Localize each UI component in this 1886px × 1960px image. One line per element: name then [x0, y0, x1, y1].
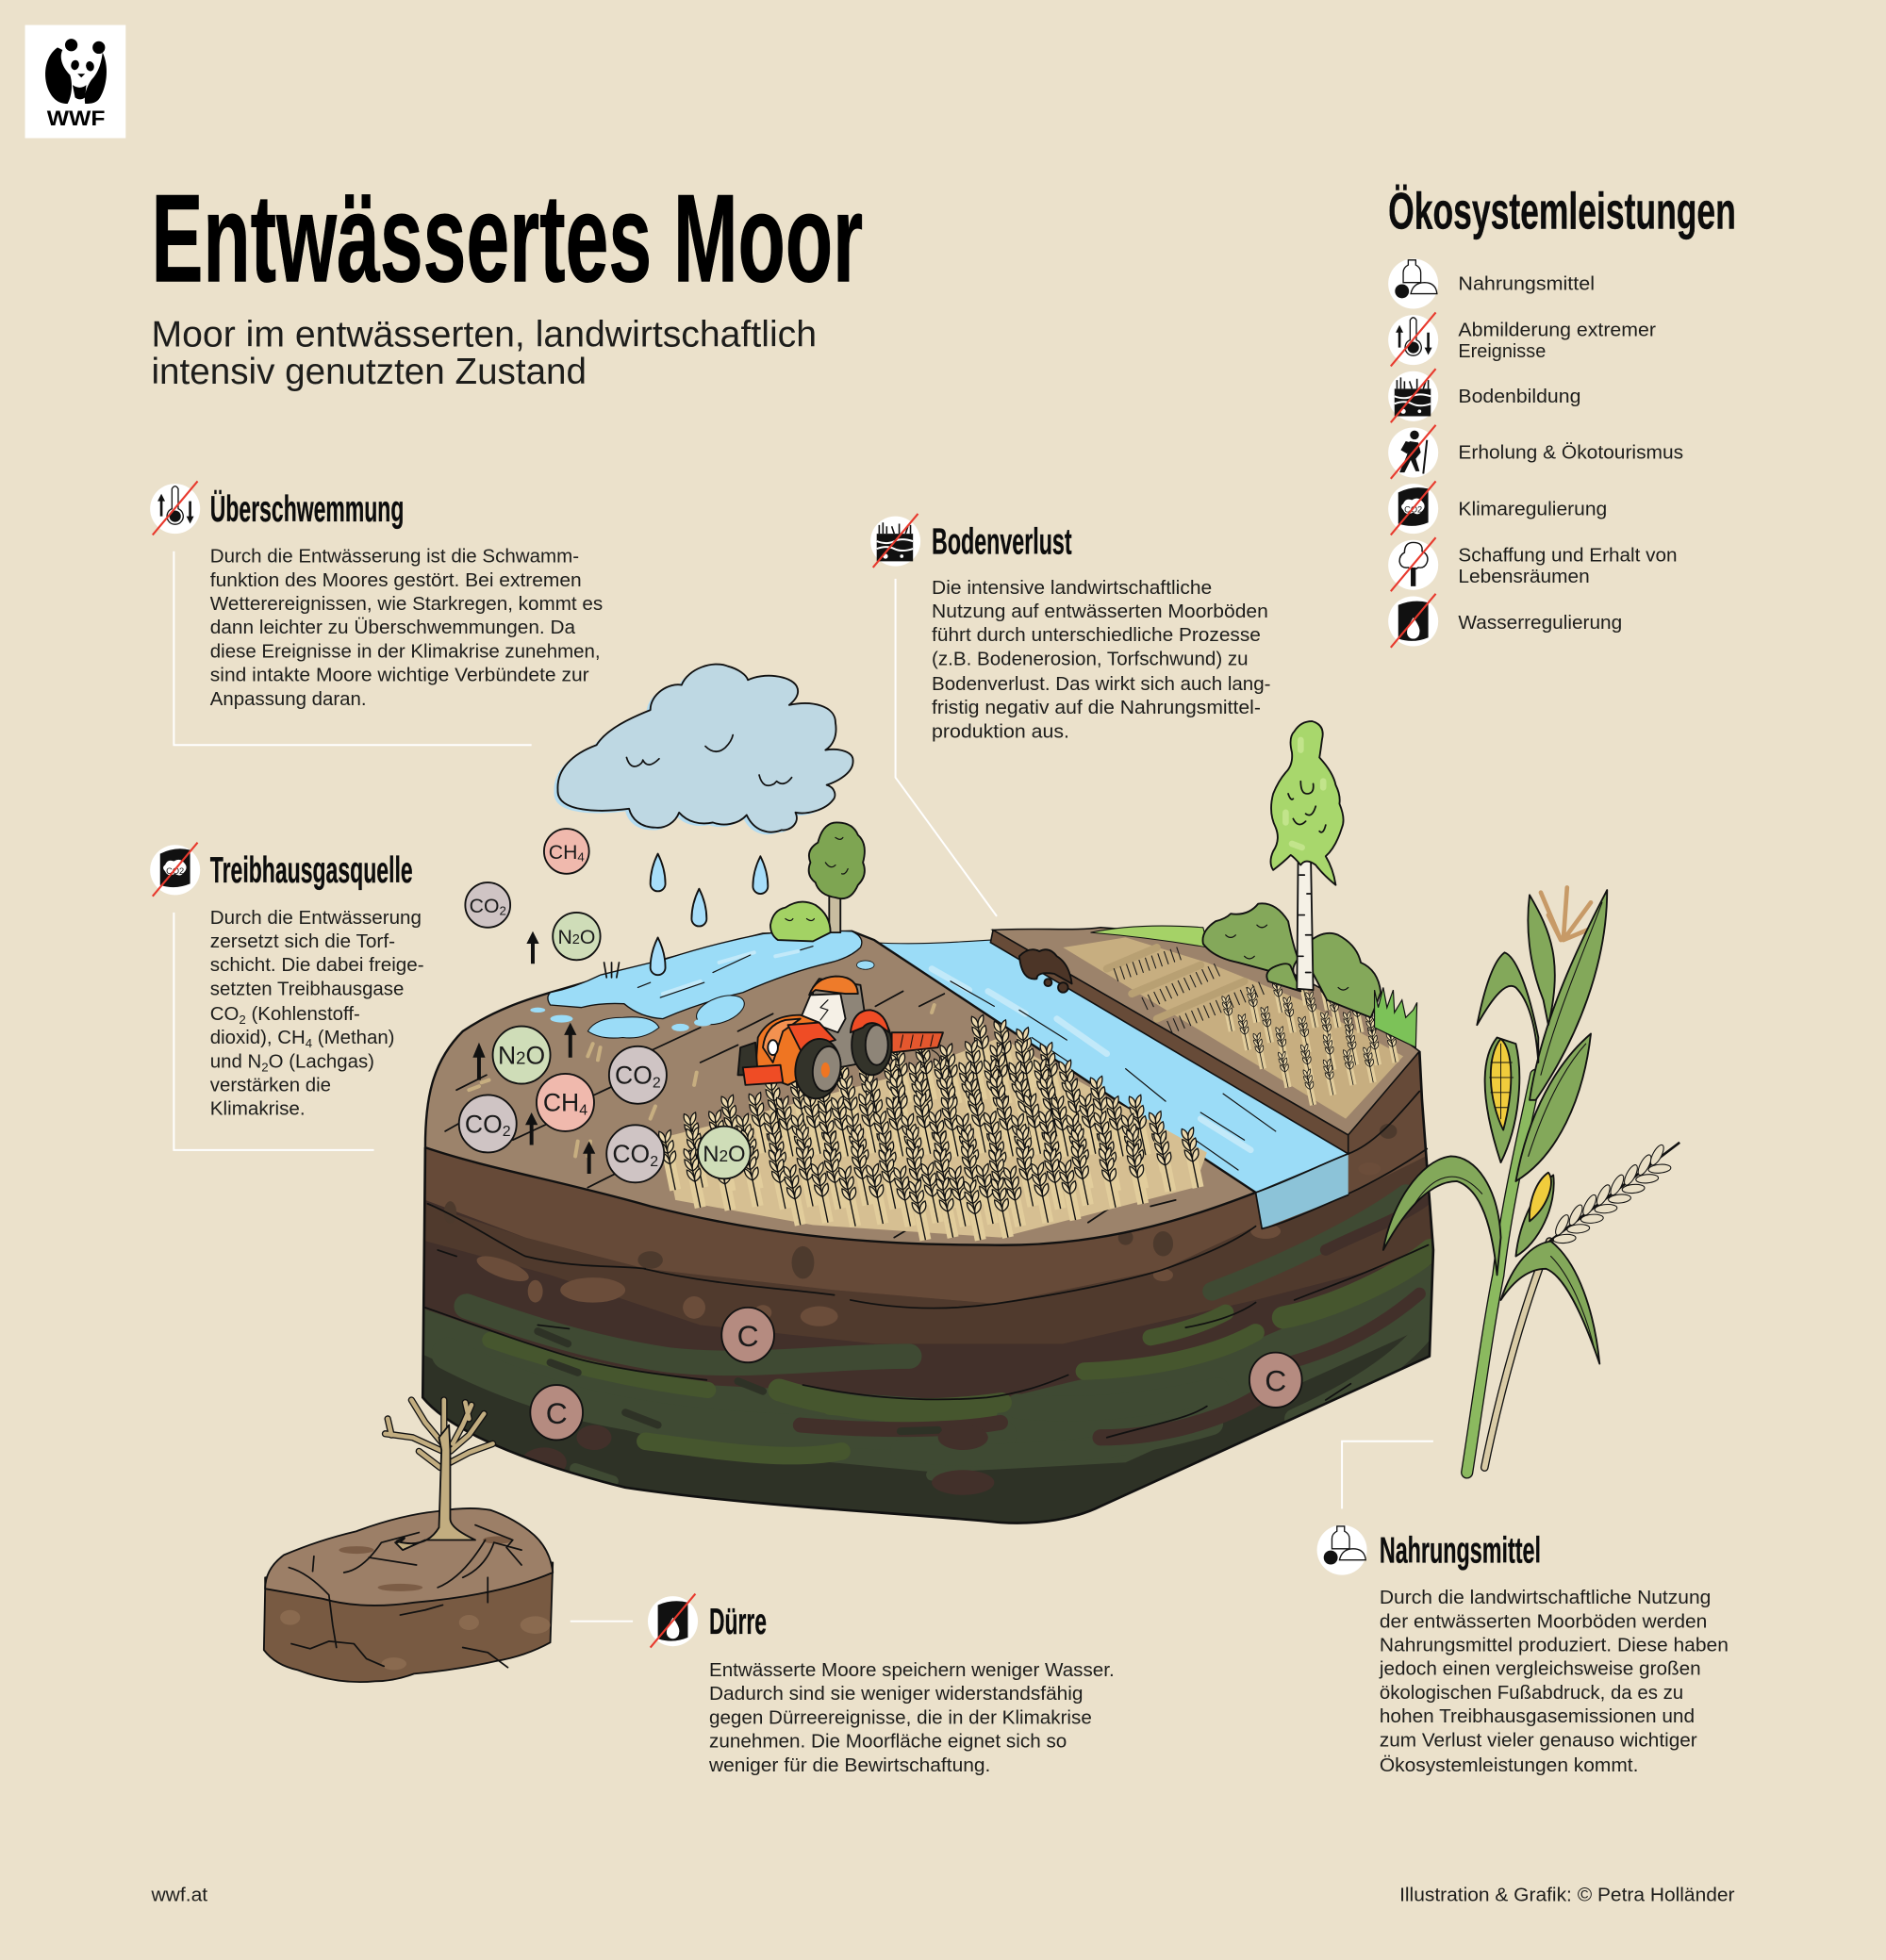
text: Dürre: zunehmen. Die Moorfläche eignet sich so — [709, 1732, 1067, 1753]
corn cobs — [1490, 1039, 1551, 1221]
WWF logo — [25, 25, 125, 139]
tassel — [1541, 887, 1594, 940]
panel: Überschwemmung — [150, 481, 603, 745]
text: Nahrungsmittel: Ökosystemleistungen kommt. — [1380, 1755, 1638, 1776]
illustration: peat clods — [1019, 949, 1072, 993]
tractor cab — [801, 977, 866, 1073]
text: Dürre: gegen Dürreereignisse, die in der Klimakrise — [709, 1707, 1092, 1728]
text: Treibhausgasquelle — [210, 908, 424, 1120]
bubble: CH4 centre: 4 — [579, 1103, 587, 1119]
legend item: Wasserregulierung: Wasserregulierung — [1458, 613, 1622, 634]
bubble: CO2 lower — [606, 1125, 664, 1182]
icon: water barrel crossed out — [648, 1594, 698, 1648]
text: Überschwemmung: Wetterereignissen, wie Starkregen, kommt es — [210, 594, 603, 615]
text: Dürre: weniger für die Bewirtschaftung. — [708, 1755, 990, 1776]
text: Treibhausgasquelle: dioxid), CH — [210, 1028, 306, 1048]
legend item: Bodenbildung — [1388, 369, 1580, 422]
text: Bodenverlust: produktion aus. — [932, 721, 1069, 742]
text: Treibhausgasquelle: CO — [210, 1004, 239, 1025]
bubble: CO2 upper: 2 — [499, 904, 506, 918]
text: Treibhausgasquelle: (Methan) — [312, 1028, 394, 1048]
heading: Nahrungsmittel: Nahrungsmittel — [1380, 1530, 1541, 1571]
bubble: N2O left — [493, 1027, 551, 1084]
icon: rain drops — [651, 854, 768, 975]
text: Treibhausgasquelle: 2 — [239, 1013, 246, 1027]
illustration: tractor — [737, 977, 943, 1101]
heading: Überschwemmung: Überschwemmung — [210, 489, 404, 530]
text: Treibhausgasquelle: 2 — [261, 1060, 269, 1074]
bubble: CH4 upper: 4 — [577, 850, 585, 865]
text: Überschwemmung: diese Ereignisse in der Klimakrise zunehmen, — [210, 641, 601, 662]
illustration: bush and tree behind water — [770, 822, 865, 941]
illustration: carbon markers — [530, 1308, 1302, 1440]
illustration: carbon markers: C — [546, 1396, 568, 1430]
bubble: CO2 lower: CO — [612, 1140, 650, 1168]
tractor front wheel — [791, 1036, 844, 1101]
text: Bodenverlust: führt durch unterschiedliche Prozesse — [932, 625, 1261, 646]
subtitle — [151, 314, 817, 392]
text: Überschwemmung: funktion des Moores gestört. Bei extremen — [210, 570, 582, 591]
legend item: Abmilderung extremer Ereignisse: Ereignisse — [1458, 341, 1546, 362]
icon: rain cloud — [554, 665, 853, 834]
heading: Dürre: Dürre — [709, 1602, 767, 1642]
legend item: Schaffung und Erhalt von Lebensräumen — [1388, 537, 1678, 591]
wheat head — [1549, 1143, 1679, 1244]
footer: credit: Illustration & Grafik: © Petra Holländer — [1399, 1886, 1735, 1906]
bubble: CO2 upper: CO — [470, 896, 499, 917]
bubble: N2O upper: N2O — [557, 927, 595, 948]
illustration: left field surface — [425, 931, 1256, 1245]
legend item: Schaffung und Erhalt von Lebensräumen: Schaffung und Erhalt von — [1458, 545, 1678, 566]
bubble: N2O left: N2O — [498, 1041, 545, 1069]
bubble: N2O lower — [698, 1127, 751, 1178]
text: Nahrungsmittel — [1379, 1588, 1729, 1776]
text: Überschwemmung: dann leichter zu Überschwemmungen. Da — [210, 618, 576, 638]
text: Überschwemmung: Durch die Entwässerung ist die Schwamm- — [210, 547, 579, 568]
heading: Bodenverlust: Bodenverlust — [932, 521, 1072, 562]
illustration: carbon markers: C — [737, 1319, 759, 1353]
panel: Bodenverlust — [870, 514, 1270, 916]
bubble: CO2 left: CO — [465, 1110, 503, 1138]
illustration: right field — [990, 926, 1419, 1154]
legend item: Abmilderung extremer Ereignisse: Abmilderung extremer — [1458, 321, 1656, 341]
bubble: CO2 lower: 2 — [650, 1154, 658, 1170]
legend item: Wasserregulierung — [1388, 594, 1622, 648]
text: Bodenverlust: fristig negativ auf die Nahrungsmittel- — [932, 698, 1261, 718]
text: Nahrungsmittel: jedoch einen vergleichsweise großen — [1379, 1659, 1701, 1680]
illustration: corn and wheat plants — [1383, 887, 1679, 1473]
illustration: carbon markers: C — [1265, 1364, 1286, 1398]
bubble: CO2 left — [459, 1095, 517, 1152]
tractor implement — [892, 1032, 943, 1067]
text: Dürre — [708, 1660, 1115, 1776]
legend item: Klimaregulierung: CO2 — [1404, 505, 1422, 515]
text: Nahrungsmittel: Durch die landwirtschaftliche Nutzung — [1380, 1588, 1711, 1608]
text: Überschwemmung — [210, 547, 603, 710]
legend item: Schaffung und Erhalt von Lebensräumen: Lebensräumen — [1458, 567, 1590, 587]
bubble: CO2 right: 2 — [653, 1076, 661, 1092]
icon: thermometer crossed out — [150, 481, 200, 535]
title: Entwässertes Moor — [151, 169, 863, 308]
text: Treibhausgasquelle: und N — [210, 1051, 261, 1072]
text: Treibhausgasquelle: Klimakrise. — [210, 1099, 306, 1120]
text: Bodenverlust: Nutzung auf entwässerten Moorböden — [932, 601, 1268, 622]
text: Treibhausgasquelle: O (Lachgas) — [269, 1051, 374, 1072]
illustration: peat block soil layers — [413, 1037, 1450, 1538]
text: Bodenverlust — [932, 578, 1270, 742]
illustration: wheat field — [659, 1014, 1207, 1240]
text: Treibhausgasquelle: 4 — [306, 1036, 312, 1050]
bubble: CH4 centre — [537, 1074, 594, 1131]
legend item: Erholung und Ökotourismus: Erholung & Ökotourismus — [1458, 443, 1683, 464]
panel: Dürre — [571, 1594, 1115, 1776]
bubble: CH4 upper — [544, 829, 589, 874]
bubble: CO2 left: 2 — [503, 1124, 511, 1140]
bubble: CO2 right — [609, 1046, 667, 1104]
tractor hood — [737, 1015, 835, 1085]
illustration: birch tree and bushes — [1202, 721, 1417, 1047]
line: Nahrungsmittel connector — [1342, 1441, 1433, 1508]
heading: Treibhausgasquelle: Treibhausgasquelle — [210, 850, 413, 891]
bubble: CO2 upper — [465, 882, 510, 928]
illustration: greenhouse gas bubbles — [459, 829, 751, 1182]
text: Treibhausgasquelle: zersetzt sich die Torf- — [210, 931, 395, 952]
legend item: Bodenbildung: Bodenbildung — [1458, 387, 1580, 407]
text: Nahrungsmittel: zum Verlust vieler genauso wichtiger — [1380, 1730, 1697, 1751]
icon: food — [1317, 1525, 1367, 1575]
arrows: rising gases — [472, 931, 595, 1174]
icon: CO2 bag crossed out — [150, 843, 200, 897]
footer: website: wwf.at — [150, 1886, 207, 1906]
icon: CO2 bag crossed out: CO2 — [166, 866, 184, 876]
corn leaves — [1383, 890, 1607, 1364]
text: Bodenverlust: (z.B. Bodenerosion, Torfschwund) zu — [932, 649, 1249, 669]
wheat stalk — [1484, 1242, 1549, 1468]
bubble: N2O lower: N2O — [703, 1142, 746, 1167]
illustration: dry soil chunk with dead tree — [264, 1400, 553, 1682]
text: Treibhausgasquelle: verstärken die — [210, 1076, 331, 1096]
text: Nahrungsmittel: hohen Treibhausgasemissionen und — [1380, 1706, 1695, 1727]
panel: Nahrungsmittel — [1317, 1525, 1729, 1776]
subtitle: intensiv genutzten Zustand — [151, 352, 587, 392]
bubble: CO2 right: CO — [615, 1062, 653, 1090]
illustration: canal — [874, 940, 1348, 1228]
legend item: Abmilderung extremer Ereignisse — [1388, 312, 1656, 366]
text: Bodenverlust: Bodenverlust. Das wirkt sich auch lang- — [932, 674, 1270, 695]
text: Treibhausgasquelle: schicht. Die dabei freige- — [210, 955, 424, 976]
text: Treibhausgasquelle: setzten Treibhausgase — [210, 979, 404, 999]
bubble: CH4 centre: CH — [543, 1089, 579, 1117]
legend item: Erholung und Ökotourismus — [1388, 425, 1683, 479]
text: Treibhausgasquelle: (Kohlenstoff- — [246, 1004, 360, 1025]
text: Nahrungsmittel: ökologischen Fußabdruck, da es zu — [1380, 1683, 1683, 1704]
subtitle: Moor im entwässerten, landwirtschaftlich — [151, 314, 817, 354]
text: Treibhausgasquelle: Durch die Entwässerung — [210, 908, 422, 929]
panel: Treibhausgasquelle — [150, 843, 424, 1150]
illustration: flooded water — [530, 921, 874, 1038]
legend item: Nahrungsmittel: Nahrungsmittel — [1458, 274, 1595, 295]
corn stem — [1467, 1075, 1536, 1473]
text: Überschwemmung: Anpassung daran. — [210, 689, 367, 710]
WWF logo: WWF — [47, 107, 105, 130]
panel: Ökosystemleistungen legend — [1388, 183, 1736, 648]
legend item: Klimaregulierung: Klimaregulierung — [1458, 499, 1607, 519]
legend item: Nahrungsmittel — [1388, 258, 1595, 308]
text: Bodenverlust: Die intensive landwirtschaftliche — [932, 578, 1212, 599]
bubble: N2O upper — [553, 913, 601, 960]
bubble: CH4 upper: CH — [549, 842, 577, 864]
text: Dürre: Entwässerte Moore speichern weniger Wasser. — [709, 1660, 1115, 1681]
text: Nahrungsmittel: Nahrungsmittel produziert. Diese haben — [1380, 1636, 1729, 1656]
icon: soil crossed out — [870, 514, 920, 568]
text: Nahrungsmittel: der entwässerten Moorböden werden — [1380, 1611, 1707, 1632]
text: Überschwemmung: sind intakte Moore wichtige Verbündete zur — [210, 666, 589, 686]
tractor rear wheel — [851, 1010, 892, 1075]
legend item: Klimaregulierung — [1388, 481, 1607, 535]
text: Dürre: Dadurch sind sie weniger widerstandsfähig — [709, 1684, 1084, 1705]
dead tree — [385, 1400, 493, 1550]
